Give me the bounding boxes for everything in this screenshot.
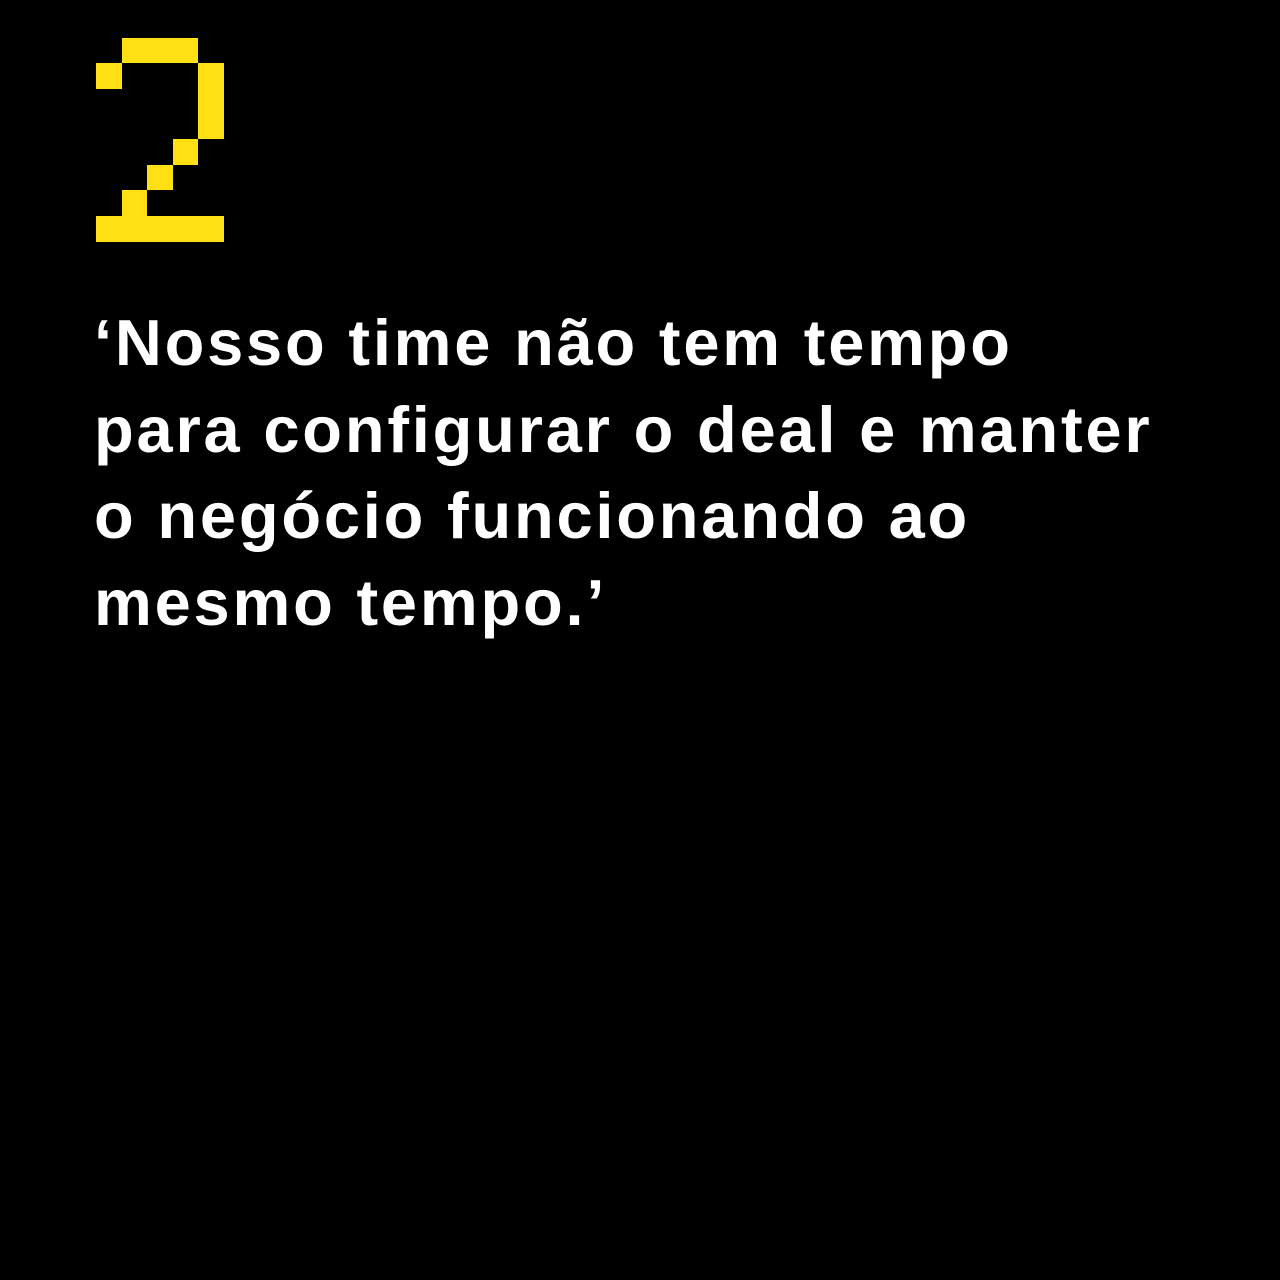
quote text: para configurar o deal e manter [94,392,1152,466]
quote text: ‘Nosso time não tem tempo [94,306,1013,379]
quote text: mesmo tempo.’ [94,566,607,638]
quote text [94,306,1152,638]
icon: pixel number 2 [96,38,224,242]
quote text: o negócio funcionando ao [94,479,970,552]
